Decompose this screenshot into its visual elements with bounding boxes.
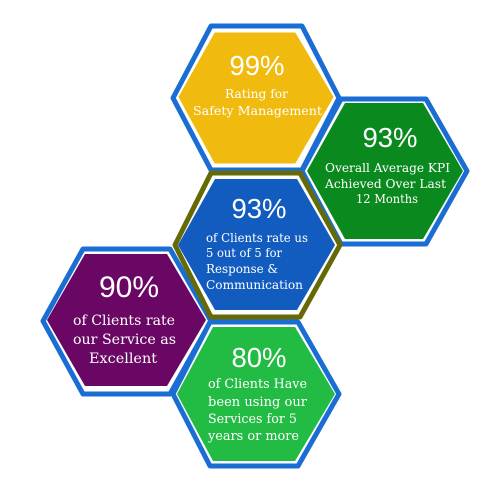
panel: response hexagon with olive border: 5 out of 5 for [206,245,282,260]
panel: light green tenure hexagon: 80% [231,342,287,373]
panel: purple service hexagon: of Clients rate [73,313,175,329]
panel: purple service hexagon: our Service as [73,332,176,348]
panel: light green tenure hexagon: Services for 5 [208,412,297,427]
panel: safety management hexagon: Rating for [225,86,288,101]
panel: KPI hexagon: Achieved Over Last [324,176,446,191]
panel: KPI hexagon: 12 Months [356,191,418,206]
panel: purple service hexagon [43,249,211,394]
panel: light green tenure hexagon [173,322,339,466]
panel: response hexagon with olive border: Communication [206,277,303,292]
panel: response hexagon with olive border: Response & [206,261,278,276]
panel: response hexagon with olive border [175,173,340,317]
panel: purple service hexagon: Excellent [89,351,157,367]
panel: light green tenure hexagon: been using our [208,395,308,410]
panel: KPI hexagon: Overall Average KPI [325,160,450,175]
panel: light green tenure hexagon: of Clients Have [208,377,307,392]
panel: safety management hexagon: Safety Management [193,103,322,118]
panel: safety management hexagon: 99% [229,50,285,81]
panel: safety management hexagon [173,26,339,170]
panel: light green tenure hexagon: years or more [207,429,299,444]
panel: KPI hexagon: 93% [362,122,418,153]
panel: response hexagon with olive border: 93% [231,193,287,224]
panel: purple service hexagon: 90% [99,271,159,304]
panel: response hexagon with olive border: of Clients rate us [206,230,308,245]
panel: KPI hexagon [302,99,467,244]
